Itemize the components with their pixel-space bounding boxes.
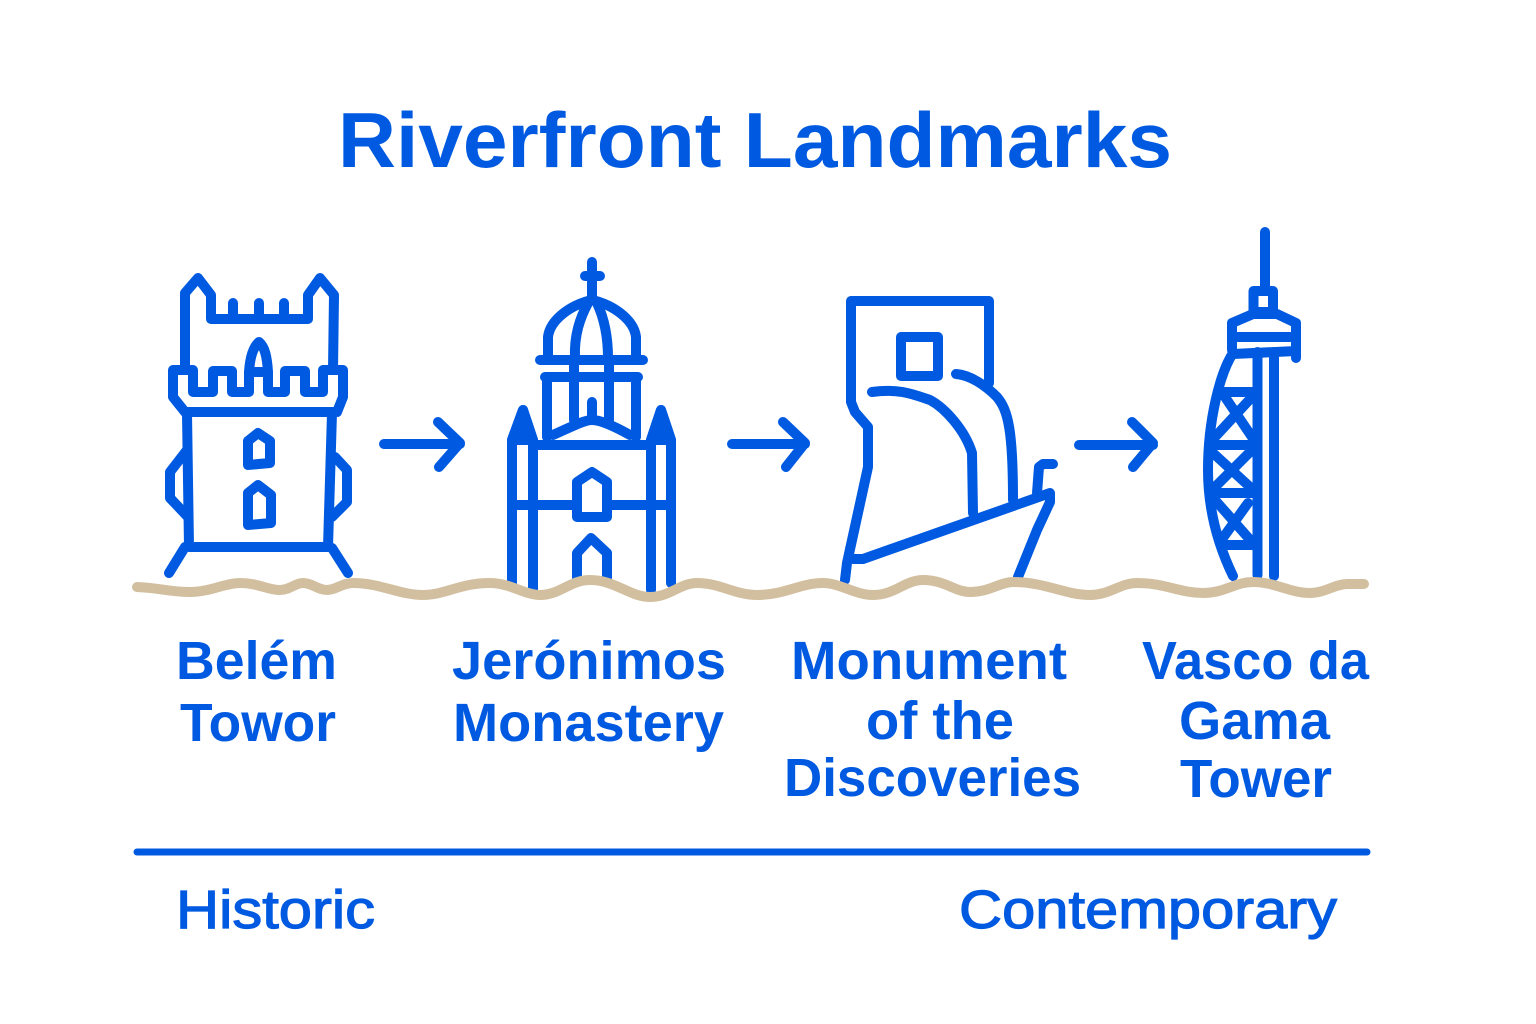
label: Belém Tower (176, 631, 337, 753)
label: Vasco da Gama Tower: Gama (1179, 691, 1331, 751)
label: Monument of the Discoveries: Monument (791, 631, 1067, 691)
label: Vasco da Gama Tower (1142, 631, 1370, 809)
label: Monument of the Discoveries (784, 631, 1081, 808)
label: Historic: Historic (176, 880, 375, 940)
label: Belém Tower: Belém (176, 631, 337, 691)
label: Monument of the Discoveries: of the (866, 691, 1014, 751)
label: Jerónimos Monastery: Jerónimos (452, 631, 726, 691)
river line (137, 580, 1364, 597)
arrow: Monument of the Discoveries to Vasco da Gama Tower (1079, 422, 1153, 467)
label: Monument of the Discoveries: Discoveries (784, 748, 1081, 808)
icon: Vasco da Gama Tower (1208, 232, 1296, 576)
icon: Jerónimos Monastery (512, 262, 671, 590)
label: Vasco da Gama Tower: Vasco da (1142, 631, 1370, 691)
icon: Monument of the Discoveries (845, 301, 1053, 580)
icon: Belém Tower (169, 278, 348, 573)
label: Contemporary: Contemporary (959, 880, 1337, 940)
label: Belém Tower: Towor (180, 693, 336, 753)
arrow: Belém Tower to Jerónimos Monastery (384, 422, 460, 467)
title: Riverfront Landmarks (338, 96, 1172, 184)
label: Jerónimos Monastery: Monastery (453, 693, 724, 753)
label: Vasco da Gama Tower: Tower (1180, 749, 1332, 809)
label: Jerónimos Monastery (452, 631, 726, 753)
arrow: Jerónimos Monastery to Monument of the Discoveries (732, 422, 805, 467)
timeline axis (137, 848, 1367, 856)
